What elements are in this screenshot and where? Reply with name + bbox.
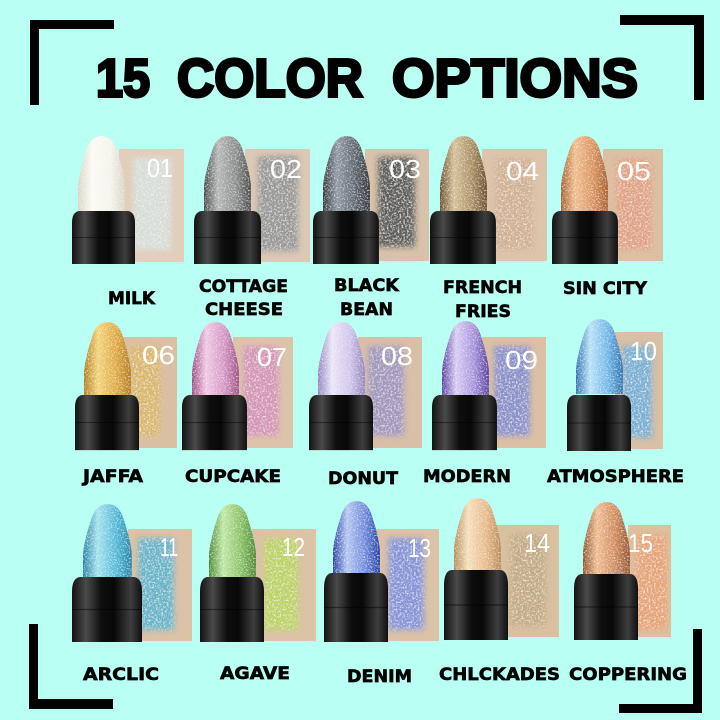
pencil and swatch 04: french fries: 04 bbox=[506, 156, 539, 186]
label: cottage cheese: CHEESE bbox=[205, 300, 283, 320]
pencil and swatch 04: french fries bbox=[430, 136, 547, 264]
pencil and swatch 07: cupcake bbox=[182, 322, 293, 450]
label: cupcake: CUPCAKE bbox=[185, 467, 281, 487]
pencil and swatch 03: black bean: 03 bbox=[389, 154, 421, 184]
pencil and swatch 01: milk bbox=[72, 136, 184, 264]
pencil and swatch 09: modern bbox=[432, 321, 546, 450]
pencil and swatch 08: donut: 08 bbox=[381, 341, 413, 371]
label: black bean: BEAN bbox=[340, 300, 393, 320]
title: OPTIONS bbox=[392, 48, 638, 108]
label: atmosphere: ATMOSPHERE bbox=[547, 467, 684, 487]
pencil and swatch 10: atmosphere bbox=[567, 319, 663, 451]
pencil and swatch 14: chlckades: 14 bbox=[524, 528, 550, 558]
pencil and swatch 02: cottage cheese bbox=[194, 136, 310, 264]
label: chlckades: CHLCKADES bbox=[439, 665, 560, 685]
label: cottage cheese bbox=[199, 277, 288, 320]
pencil and swatch 12: agave bbox=[200, 504, 316, 642]
pencil and swatch 15: coppering bbox=[574, 502, 671, 640]
pencil and swatch 05: sin city: 05 bbox=[617, 156, 651, 186]
label: black bean bbox=[334, 276, 400, 320]
label: cottage cheese: COTTAGE bbox=[199, 277, 288, 297]
pencil and swatch 11: arclic bbox=[72, 504, 192, 642]
title: 15 bbox=[96, 48, 150, 108]
pencil and swatch 07: cupcake: 07 bbox=[257, 342, 287, 372]
label: sin city: SIN CITY bbox=[563, 279, 648, 299]
pencil and swatch 11: arclic: 11 bbox=[160, 532, 178, 562]
corner bracket: bottom right bbox=[619, 629, 702, 713]
label: milk: MILK bbox=[108, 289, 156, 309]
pencil and swatch 15: coppering: 15 bbox=[628, 528, 653, 558]
pencil and swatch 06: jaffa bbox=[75, 322, 177, 450]
pencil and swatch 12: agave: 12 bbox=[282, 532, 305, 562]
pencil and swatch 06: jaffa: 06 bbox=[142, 340, 175, 370]
pencil and swatch 10: atmosphere: 10 bbox=[630, 336, 657, 366]
title bbox=[96, 48, 638, 108]
label: agave: AGAVE bbox=[220, 664, 290, 684]
label: jaffa: JAFFA bbox=[82, 467, 144, 487]
title: COLOR bbox=[177, 48, 363, 108]
label: french fries: FRENCH bbox=[443, 278, 522, 298]
pencil and swatch 05: sin city bbox=[552, 136, 663, 264]
corner bracket: bottom left bbox=[29, 624, 113, 709]
pencil and swatch 01: milk: 01 bbox=[147, 153, 173, 183]
label: french fries: FRIES bbox=[455, 302, 511, 322]
pencil and swatch 08: donut bbox=[309, 322, 422, 450]
pencil and swatch 13: denim: 13 bbox=[408, 533, 431, 563]
label: black bean: BLACK bbox=[334, 276, 400, 296]
label: coppering: COPPERING bbox=[569, 665, 687, 685]
label: donut: DONUT bbox=[328, 469, 398, 489]
corner bracket: top right bbox=[620, 15, 704, 100]
corner bracket: top left bbox=[30, 20, 114, 105]
pencil and swatch 02: cottage cheese: 02 bbox=[270, 154, 302, 184]
pencil and swatch 14: chlckades bbox=[444, 498, 559, 640]
label: french fries bbox=[443, 278, 522, 322]
pencil and swatch 13: denim bbox=[324, 501, 439, 642]
pencil and swatch 09: modern: 09 bbox=[505, 345, 538, 375]
label: arclic: ARCLIC bbox=[83, 665, 159, 685]
label: denim: DENIM bbox=[347, 667, 412, 687]
pencil and swatch 03: black bean bbox=[313, 136, 429, 264]
label: modern: MODERN bbox=[423, 467, 511, 487]
